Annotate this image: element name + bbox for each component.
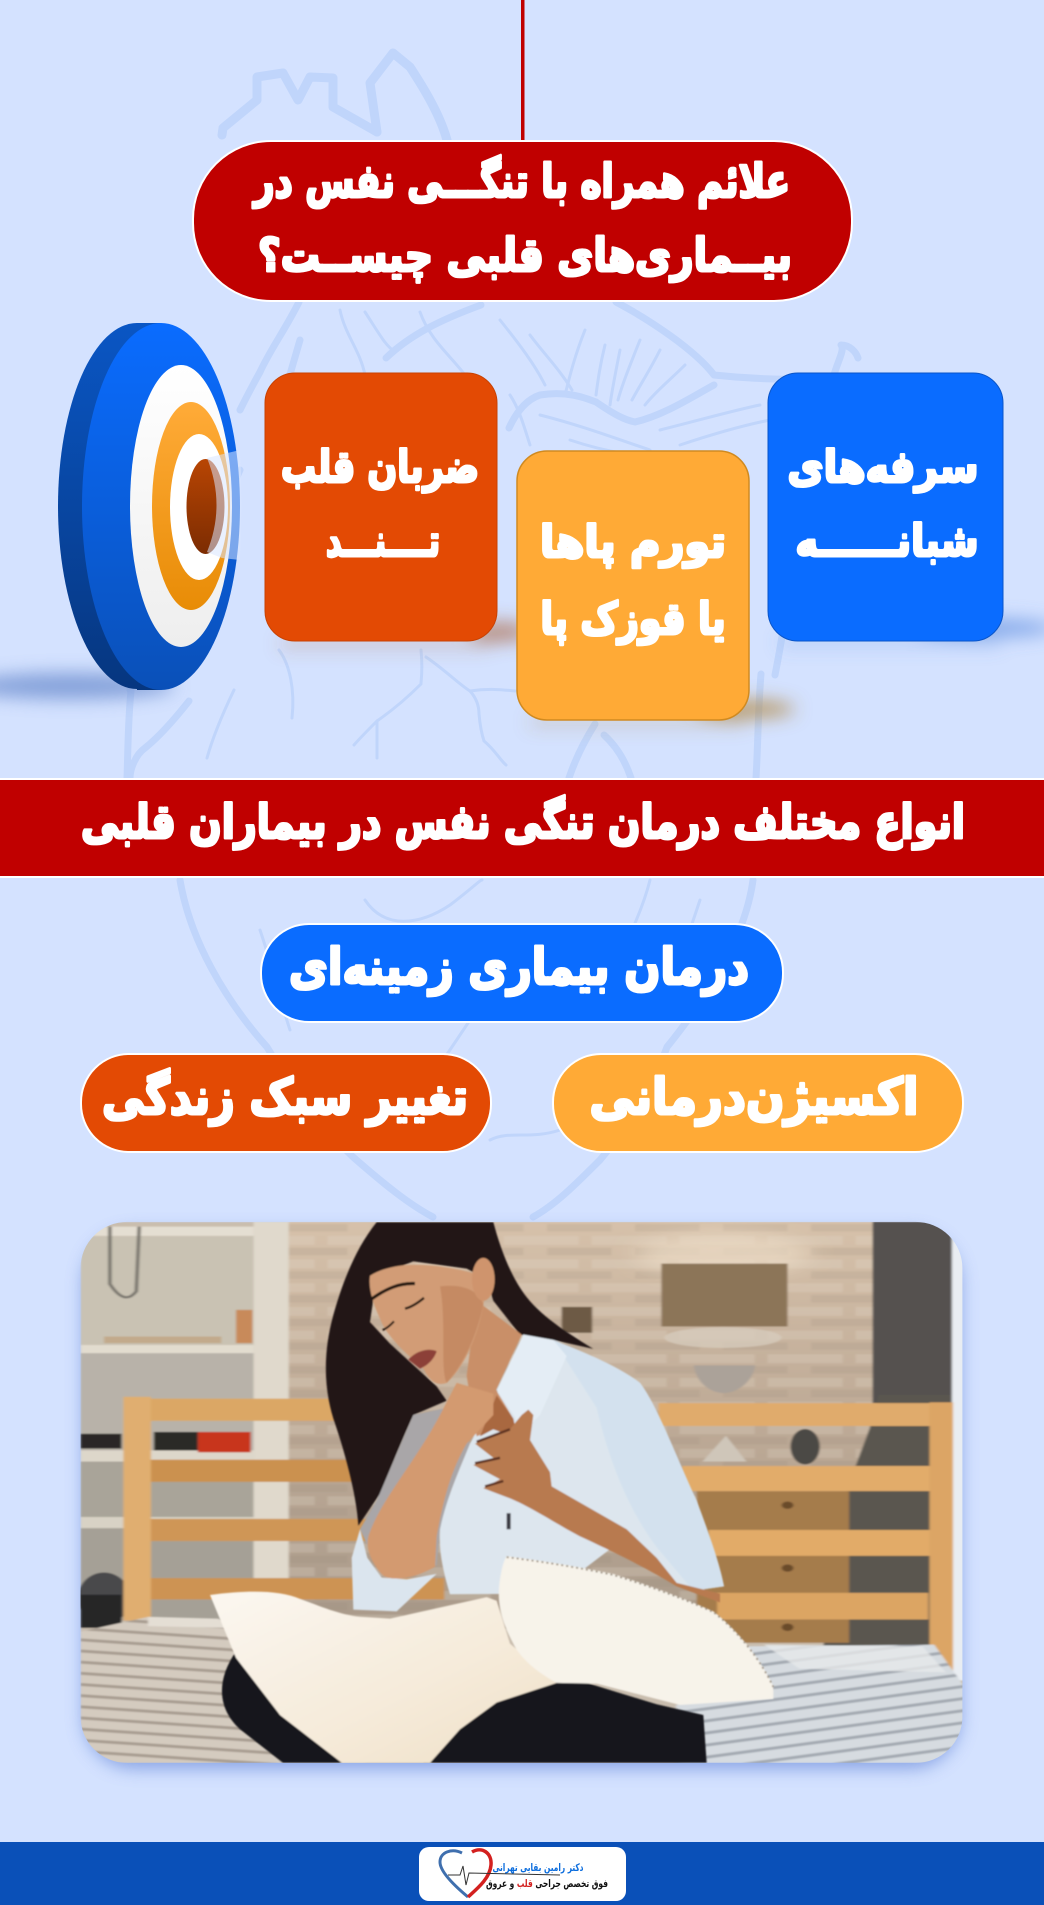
- photo: woman holding chest with pillow: [209, 1222, 774, 1763]
- treatment pill: underlying disease: [261, 924, 783, 1022]
- photo: bedroom background: [80, 1222, 962, 1763]
- title pill: [193, 141, 852, 301]
- section banner: [0, 778, 1044, 878]
- treatment pill: underlying disease: درمان بیماری زمینه‌ای: [289, 938, 749, 996]
- card: rapid heartbeat: ضربان قلب: [281, 442, 479, 493]
- card: rapid heartbeat: تــــنـــد: [326, 516, 440, 567]
- card: night cough: [768, 373, 1003, 641]
- card: leg swelling: تورم پاها: [540, 517, 726, 568]
- title pill: علائم همراه با تنگـــی نفس در: [252, 154, 790, 208]
- target shadow: [0, 673, 175, 699]
- icon: target: [58, 323, 242, 690]
- card: night cough: سرفه‌های: [788, 442, 978, 493]
- card shadows: [280, 619, 1044, 726]
- card: night cough: شبانــــــه: [796, 516, 978, 567]
- treatment pill: lifestyle change: تغییر سبک زندگی: [102, 1068, 468, 1127]
- logo: [419, 1847, 626, 1901]
- treatment pill: oxygen therapy: اکسیژن‌درمانی: [590, 1068, 918, 1127]
- title pill: بیــماری‌های قلبی چیســت؟: [258, 228, 792, 283]
- logo: دکتر رامین بقایی تهرانی: [492, 1862, 584, 1874]
- connector line: [521, 0, 524, 142]
- footer bar: [0, 1842, 1044, 1905]
- card: leg swelling: یا قوزک پا: [540, 594, 726, 645]
- photo shadow: [84, 1232, 960, 1768]
- heart line-art watermark: [127, 53, 858, 1217]
- logo: فوق تخصص جراحی قلب و عروق: [486, 1878, 608, 1890]
- treatment pill: lifestyle change: [81, 1054, 491, 1152]
- card: leg swelling: [517, 451, 749, 720]
- treatment pill: oxygen therapy: [553, 1054, 963, 1152]
- card: rapid heartbeat: [265, 373, 497, 641]
